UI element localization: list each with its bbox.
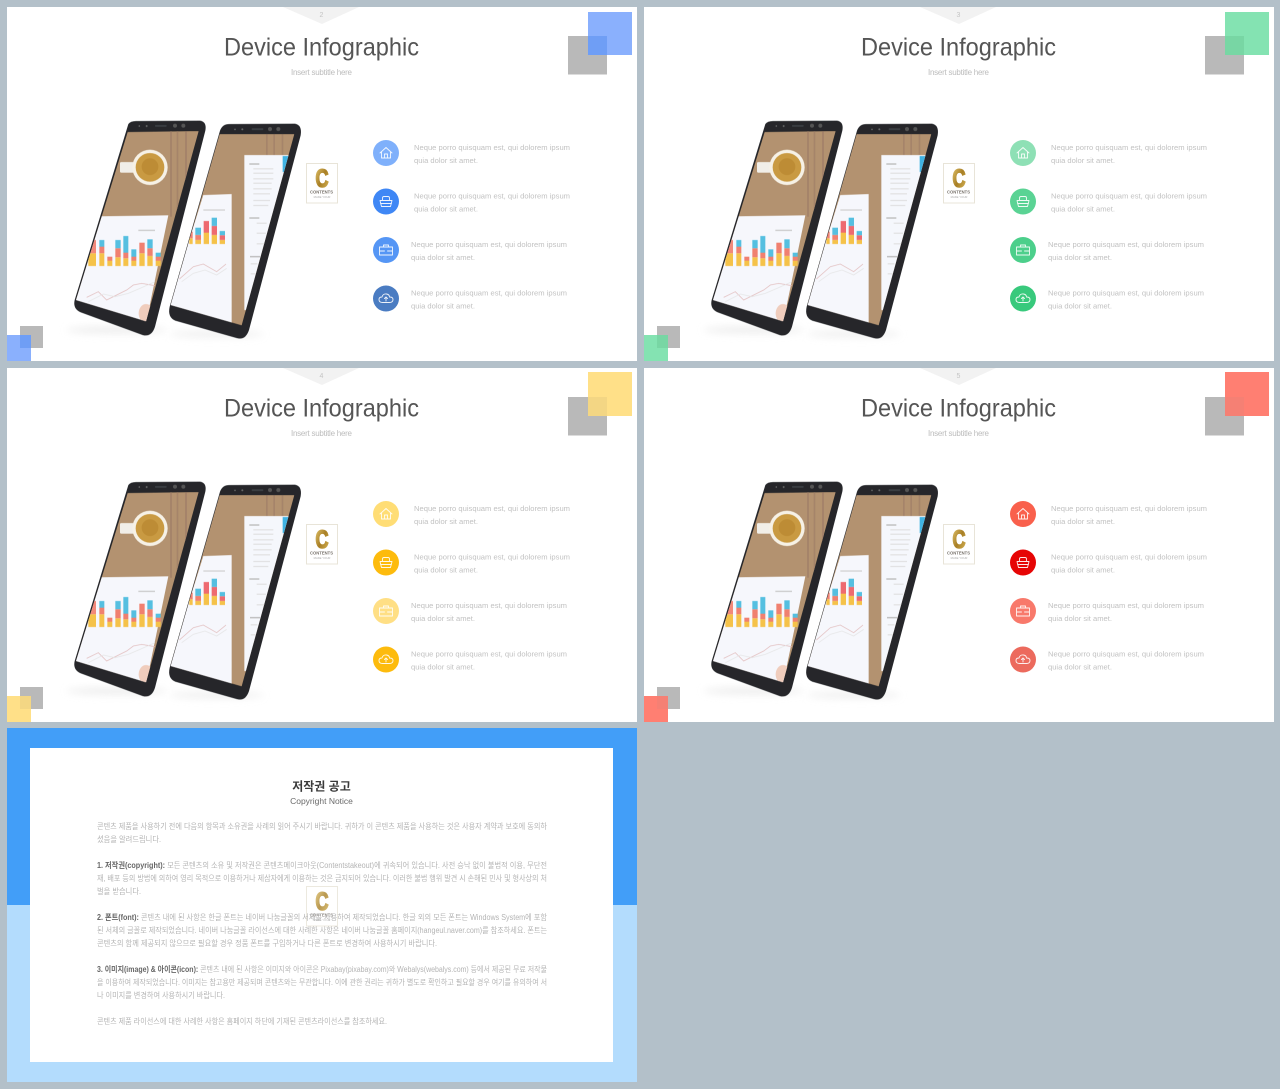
decorative squares bottom left xyxy=(644,326,680,361)
item 1 xyxy=(373,501,570,527)
section 1: copyright: 벌을 받습니다. xyxy=(97,886,141,896)
panel: slide 3 green xyxy=(644,7,1274,361)
decorative squares top right xyxy=(568,12,632,74)
section 2: font: 된 서체의 글꼴로 제작되었습니다. 네이버 나눔글꼴 라이선스에 대한 사례한 사항은 네이버 나눔글꼴 홈페이지(hangeul.naver.com)를 참조하세요. 폰트는 xyxy=(97,925,547,935)
title: Device Infographic xyxy=(861,394,1056,422)
item 4: Neque porro quisquam est, qui dolorem ipsum xyxy=(1048,650,1204,658)
item 3: Neque porro quisquam est, qui dolorem ipsum xyxy=(411,601,567,610)
item 2: Neque porro quisquam est, qui dolorem ipsum xyxy=(1051,192,1207,200)
item 1: Neque porro quisquam est, qui dolorem ipsum xyxy=(1051,504,1207,513)
item 2: quia dolor sit amet. xyxy=(414,566,478,574)
item 3 xyxy=(1010,237,1204,263)
logo xyxy=(306,524,338,564)
section 2: font xyxy=(97,912,548,948)
page number tab xyxy=(920,368,996,385)
logo xyxy=(306,164,338,203)
title: Device Infographic xyxy=(224,394,419,422)
intro paragraph xyxy=(97,821,548,844)
item 1 xyxy=(373,140,570,166)
intro paragraph: 셨음을 알려드립니다. xyxy=(97,834,161,844)
item 2: Neque porro quisquam est, qui dolorem ipsum xyxy=(414,192,570,200)
copyright subheading: Copyright Notice xyxy=(290,796,353,806)
item 2 xyxy=(373,188,570,214)
item 1: quia dolor sit amet. xyxy=(414,156,478,165)
page number tab: 3 xyxy=(957,12,961,19)
item 2: Neque porro quisquam est, qui dolorem ipsum xyxy=(1051,552,1207,562)
item 3: Neque porro quisquam est, qui dolorem ipsum xyxy=(1048,240,1204,249)
item 4: Neque porro quisquam est, qui dolorem ipsum xyxy=(411,650,567,658)
page number tab xyxy=(283,7,359,24)
item 4: quia dolor sit amet. xyxy=(1048,302,1112,310)
item 1: Neque porro quisquam est, qui dolorem ipsum xyxy=(414,143,570,152)
subtitle: Insert subtitle here xyxy=(291,429,353,438)
panel: slide 2 blue xyxy=(7,7,637,361)
item 2 xyxy=(1010,550,1207,576)
intro paragraph: 콘텐츠 제품을 사용하기 전에 다음의 항목과 소유권을 사례의 읽어 주시기 바랍니다. 귀하가 이 콘텐츠 제품을 사용하는 것은 사용자 계약과 보호에 동의하 xyxy=(97,821,548,831)
page number tab: 5 xyxy=(957,373,961,380)
item 4: quia dolor sit amet. xyxy=(411,662,475,672)
decorative squares top right xyxy=(1205,12,1269,74)
item 4 xyxy=(1010,286,1204,312)
item 3: quia dolor sit amet. xyxy=(411,253,475,262)
item 2 xyxy=(373,550,570,576)
item 3: Neque porro quisquam est, qui dolorem ipsum xyxy=(411,240,567,249)
page number tab xyxy=(283,368,359,385)
item 3: quia dolor sit amet. xyxy=(411,614,475,623)
section 1: copyright xyxy=(97,860,547,896)
item 4 xyxy=(373,286,567,312)
section 3: image and icon: 나 이미지를 변경하여 사용하시기 바랍니다. xyxy=(97,990,225,1000)
panel: slide 5 red xyxy=(644,368,1274,722)
item 2: quia dolor sit amet. xyxy=(1051,204,1115,214)
panel: copyright notice slide xyxy=(7,728,637,1082)
section 3: image and icon xyxy=(97,964,547,1000)
item 4: Neque porro quisquam est, qui dolorem ipsum xyxy=(1048,288,1204,298)
item 4: quia dolor sit amet. xyxy=(411,302,475,310)
section 1: copyright: 1. 저작권(copyright): 모든 콘텐츠의 소유 및 저작권은 콘텐츠메이크아웃(Contentstakeout)에 귀속되어 있습니다. 사전 승낙 없이 불법적 이용, 무단전 xyxy=(97,860,547,870)
item 2 xyxy=(1010,188,1207,214)
section 1: copyright: 재, 배포 등의 방법에 의하여 영리 목적으로 이용하거나 제삼자에게 이용하는 것은 금지되어 있습니다. 이러한 불법 행위 발견 시 손해된 민사 및 형사상의 처 xyxy=(97,873,547,883)
item 4 xyxy=(1010,646,1204,672)
section 2: font: 2. 폰트(font): 콘텐츠 내에 된 사항은 한글 폰트는 네이버 나눔글꼴의 서체를 사용하여 제작되었습니다. 한글 외의 모든 폰트는 Windows System에 포함 xyxy=(97,912,548,922)
item 1: quia dolor sit amet. xyxy=(1051,517,1115,526)
subtitle: Insert subtitle here xyxy=(928,429,990,438)
subtitle: Insert subtitle here xyxy=(928,68,990,77)
phones illustration xyxy=(67,121,301,339)
item 4: Neque porro quisquam est, qui dolorem ipsum xyxy=(411,288,567,298)
copyright logo watermark xyxy=(306,886,338,926)
item 1: quia dolor sit amet. xyxy=(414,517,478,526)
title: Device Infographic xyxy=(861,34,1056,62)
logo xyxy=(944,524,974,564)
decorative squares bottom left xyxy=(7,326,43,361)
item 3 xyxy=(373,598,567,624)
page number tab: 2 xyxy=(320,12,324,19)
phones illustration xyxy=(704,482,938,700)
page number tab: 4 xyxy=(320,373,324,380)
panel: slide 4 yellow xyxy=(7,368,637,722)
item 4: quia dolor sit amet. xyxy=(1048,662,1112,672)
item 1 xyxy=(1010,140,1207,166)
decorative squares bottom left xyxy=(644,687,680,722)
section 3: image and icon: 을 이용하여 제작되었습니다. 이미지는 참고용만 제공되며 콘텐츠와는 무관합니다. 이에 관한 권리는 귀하가 별도로 확인하고 필요할 경우 여기를 유의하여 서 xyxy=(97,977,547,987)
decorative squares top right xyxy=(568,372,632,436)
item 1: Neque porro quisquam est, qui dolorem ipsum xyxy=(414,504,570,513)
item 2: quia dolor sit amet. xyxy=(1051,566,1115,574)
item 1: Neque porro quisquam est, qui dolorem ipsum xyxy=(1051,143,1207,152)
phones illustration xyxy=(704,121,938,339)
subtitle: Insert subtitle here xyxy=(291,68,353,77)
section 3: image and icon: 3. 이미지(image) & 아이콘(icon): 콘텐츠 내에 된 사항은 이미지와 아이콘은 Pixabay(pixabay.com)와 Webalys(webalys.com) 등에서 제공된 무료 저작물 xyxy=(97,964,547,974)
decorative squares bottom left xyxy=(7,687,43,722)
item 3: quia dolor sit amet. xyxy=(1048,253,1112,262)
section 2: font: 콘텐츠의 함께 제공되지 않으므로 필요할 경우 정품 폰트를 구입하거나 다른 폰트로 변경하여 사용하시기 바랍니다. xyxy=(97,938,437,948)
phones illustration xyxy=(67,482,301,700)
title: Device Infographic xyxy=(224,34,419,62)
item 3 xyxy=(1010,598,1204,624)
item 2: Neque porro quisquam est, qui dolorem ipsum xyxy=(414,552,570,562)
item 1 xyxy=(1010,501,1207,527)
item 3 xyxy=(373,237,567,263)
item 3: quia dolor sit amet. xyxy=(1048,614,1112,623)
item 2: quia dolor sit amet. xyxy=(414,204,478,214)
page number tab xyxy=(920,7,996,24)
item 4 xyxy=(373,646,567,672)
closing line: 콘텐츠 제품 라이선스에 대한 사례한 사항은 홈페이지 하단에 기재된 콘텐츠라이선스를 참조하세요. xyxy=(97,1016,387,1026)
decorative squares top right xyxy=(1205,372,1269,436)
item 1: quia dolor sit amet. xyxy=(1051,156,1115,165)
logo xyxy=(944,164,974,203)
item 3: Neque porro quisquam est, qui dolorem ipsum xyxy=(1048,601,1204,610)
copyright heading: 저작권 공고 xyxy=(292,778,351,794)
